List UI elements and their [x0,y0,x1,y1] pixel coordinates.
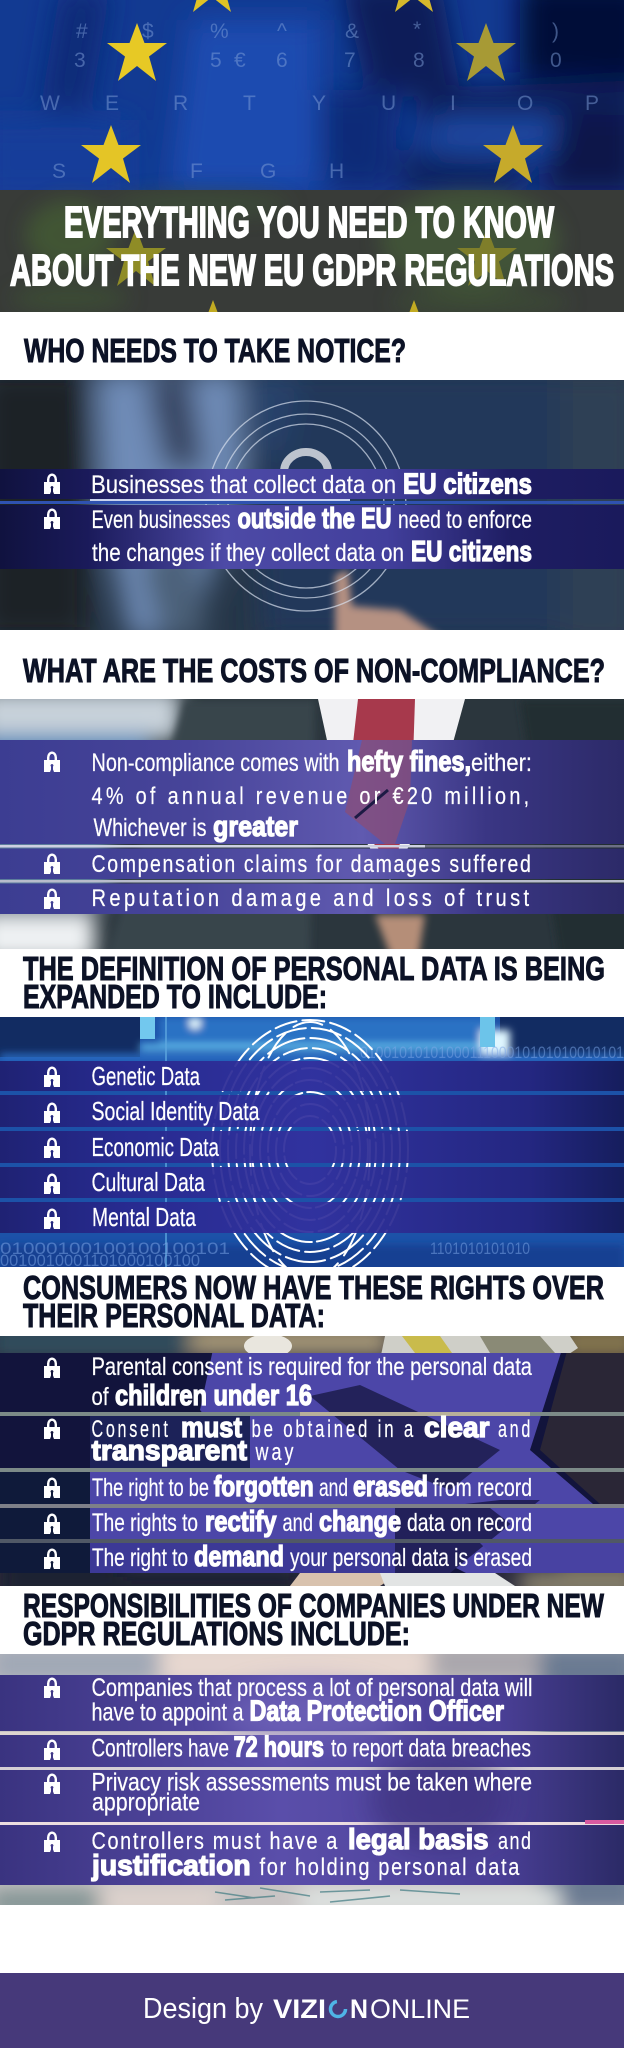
heading: consumer rights: THEIR PERSONAL DATA: [23,1298,325,1335]
heading: who needs to take notice: WHO NEEDS TO TAKE NOTICE? [24,333,406,370]
bullet: right to rectify: data on record [407,1509,532,1537]
bullet: data protection officer [44,1674,532,1728]
icon: lock [44,1102,60,1123]
bullet: data protection officer: Data Protection Officer [250,1696,504,1728]
bullet: economic data: Economic Data [92,1132,219,1162]
keyboard letters: U [381,92,396,115]
bullet: right to rectify [44,1506,532,1538]
heading: responsibilities of companies [23,1588,604,1653]
icon: lock [44,1418,60,1439]
bullet: hefty fines: hefty fines, [347,746,471,778]
bullet: right to demand erasure: your personal data is erased [290,1544,532,1572]
bullet: privacy risk assessments: Privacy risk assessments must be taken where [92,1768,532,1796]
bullet: right to demand erasure: demand [194,1541,284,1573]
blurred hand shading inside bands [220,1685,510,1850]
bullet: parental consent: children under 16 [115,1380,312,1412]
icon: lock [44,1832,60,1852]
icon: lock [44,1066,60,1087]
content bands [0,1061,624,1233]
binary code rows [0,1043,624,1270]
logo ring [330,2002,346,2016]
bullet: legal basis: justification [91,1850,251,1882]
photo: digital fingerprint with binary code [0,1017,624,1275]
bullet: 72 hours breach reporting: to report data breaches [331,1734,531,1762]
bullet: data protection officer: have to appoint a [92,1698,244,1726]
icon: lock [44,1174,60,1194]
panel: responsibilities of companies [0,1644,624,1915]
bullet: social identity data [44,1100,260,1126]
photo: businessman in suit with red tie [0,690,624,962]
photo: hands on a laptop keyboard [0,1644,624,1915]
keyboard letters: S [52,160,66,183]
footer bar [0,1973,624,2048]
bullet: even businesses outside the EU: outside the EU [238,503,392,535]
content bands [0,469,624,569]
keyboard letters: H [329,160,344,183]
keyboard letters: % [210,20,229,43]
bullet: compensation claims: Compensation claims for damages suffered [92,851,532,878]
keyboard letters: 3 [74,49,86,72]
heading: definition of personal data: EXPANDED TO INCLUDE: [23,979,327,1016]
bullet: parental consent: Parental consent is required for the personal data [92,1353,532,1381]
bullet: 72 hours breach reporting: 72 hours [234,1732,324,1764]
keyboard letters: 7 [344,49,356,72]
panel: consumer rights [0,1326,624,1600]
bullet: right to rectify: change [319,1506,401,1538]
bullet: even businesses outside the EU: need to enforce [398,506,532,534]
icon: lock [44,508,60,529]
keyboard letters: G [260,160,276,183]
footer credit: VIZI [273,1994,326,2024]
keyboard letters: * [413,18,421,41]
bullet: legal basis: and [498,1828,532,1855]
bullet: businesses that collect data: EU citizens [403,468,532,500]
keyboard letters: Y [312,92,326,115]
bullet: cultural data: Cultural Data [92,1167,205,1197]
bullet: right to rectify: and [282,1509,313,1537]
icon: lock [44,1740,60,1760]
keyboard letters: 5 [210,49,222,72]
footer credit: Design by [143,1993,263,2025]
content bands [0,1675,624,1885]
heading: definition of personal data [23,951,605,1016]
icon: lock [44,1208,60,1229]
keyboard letters: 6 [276,49,288,72]
icon: lock [44,1478,60,1498]
keyboard letters: ^ [277,20,287,43]
bullet: clear and transparent consent: and [498,1416,533,1443]
bullet: genetic data [44,1066,200,1087]
bullet: clear and transparent consent: transparent [92,1435,247,1467]
binary code rows: 01000100100100100101 [0,1239,230,1258]
keyboard letters [40,18,599,183]
bullet: hefty fines: 4% of annual revenue or €20 million, [92,783,532,810]
keyboard letters: F [190,160,203,183]
bullet: right to be forgotten: The right to be [92,1474,209,1502]
keyboard letters: ) [552,20,559,43]
bullet: cultural data [44,1172,206,1194]
panel: costs of non-compliance [0,690,624,962]
bullet: even businesses outside the EU: Even businesses [92,506,230,534]
bullet: clear and transparent consent [44,1412,533,1467]
bullet: right to be forgotten: from record [433,1474,532,1502]
icon: lock [44,474,60,494]
icon: lock [44,1358,60,1378]
keyboard letters: P [585,92,599,115]
keyboard letters: 8 [413,49,425,72]
icon: lock [44,1514,60,1534]
bullet: right to rectify: rectify [205,1506,276,1538]
keyboard letters: T [243,92,256,115]
bullet: parental consent: of [92,1383,109,1411]
bullet: right to be forgotten [44,1471,532,1503]
bullet: 72 hours breach reporting [44,1732,531,1764]
panel: header with EU flag keyboard [0,0,624,312]
bullet: clear and transparent consent: be obtained in a [252,1416,416,1443]
bullet: economic data [44,1136,220,1158]
bullet: legal basis: legal basis [348,1824,489,1856]
icon: lock [44,888,60,909]
heading: consumer rights [23,1270,604,1335]
header photo background [0,0,624,190]
bullet: hefty fines: Non-compliance comes with [92,749,340,777]
keyboard letters: # [76,20,88,43]
keyboard letters: & [345,20,359,43]
bullet: mental data [44,1206,196,1229]
bullet: reputation damage: Reputation damage and loss of trust [92,885,532,912]
keyboard letters: R [173,92,188,115]
bullet: right to rectify: The rights to [92,1509,198,1537]
icon: lock [44,1548,60,1569]
footer credit [143,1993,470,2025]
bullet: businesses that collect data: Businesses that collect data on [91,471,396,499]
keyboard letters: € [234,49,246,72]
bullet: clear and transparent consent: way [255,1439,296,1466]
bullet: 72 hours breach reporting: Controllers have [92,1734,229,1762]
photo: suited man pressing a fingerprint lock [0,380,624,630]
bullet: businesses that collect data [44,472,532,494]
bullet: compensation claims [44,854,530,878]
title [10,206,614,286]
bullet: even businesses outside the EU [44,503,532,568]
bullet: reputation damage [44,888,530,912]
bullet: social identity data: Social Identity Data [92,1096,260,1126]
title band [0,180,624,312]
content bands with laptop showing through [0,1340,624,1590]
binary code rows: 0010010001101000100100 [0,1251,200,1270]
bullet: parental consent [44,1353,532,1412]
footer credit: N [350,1994,368,2024]
bullet: clear and transparent consent: Consent [92,1416,170,1443]
bullet: genetic data: Genetic Data [92,1061,200,1091]
bullet: legal basis: for holding personal data [260,1854,521,1881]
bullet: even businesses outside the EU: the changes if they collect data on [92,539,404,567]
panel: who needs to take notice [0,380,624,630]
heading: responsibilities of companies: GDPR REGULATIONS INCLUDE: [23,1616,410,1653]
icon: lock [44,1138,60,1158]
bullet: right to demand erasure [44,1541,532,1573]
graphic: fingerprint scan rings and padlock [206,401,406,611]
bullet: mental data: Mental Data [92,1202,196,1232]
bullet: hefty fines [44,746,532,843]
bullet: right to be forgotten: and [319,1474,348,1502]
bullet: clear and transparent consent: clear [424,1412,490,1444]
panel: definition of personal data [0,1017,624,1280]
bullet: privacy risk assessments [44,1768,532,1816]
graphic: fingerprint [212,1020,408,1280]
icon: lock [44,1678,60,1698]
band divider lines [0,1412,624,1543]
bullet: hefty fines: either: [471,749,532,777]
keyboard letters: E [105,92,119,115]
bullet: even businesses outside the EU: EU citizens [411,536,532,568]
photo: person using laptop [0,1326,624,1600]
icon: lock [44,854,60,874]
keyboard letters: W [40,92,60,115]
keyboard letters: O [517,92,533,115]
bullet: legal basis [44,1824,532,1882]
bullet: privacy risk assessments: appropriate [92,1788,200,1816]
EU flag stars [81,0,543,183]
bullet: hefty fines: greater [213,811,298,843]
keyboard letters: I [450,92,456,115]
icon: lock [44,1774,60,1794]
icon: lock [44,752,60,772]
footer credit: ONLINE [370,1994,470,2024]
binary code rows: 1101010101010 [430,1239,530,1258]
content bands [0,740,624,914]
bullet: right to demand erasure: The right to [92,1544,188,1572]
keyboard letters: 0 [550,49,562,72]
bullet: legal basis: Controllers must have a [92,1828,339,1855]
bullet: clear and transparent consent: must [181,1412,242,1444]
bullet: right to be forgotten: erased [353,1471,428,1503]
bullet: hefty fines: Whichever is [94,814,206,842]
bullet: right to be forgotten: forgotten [214,1471,314,1503]
keyboard letters: $ [142,20,154,43]
